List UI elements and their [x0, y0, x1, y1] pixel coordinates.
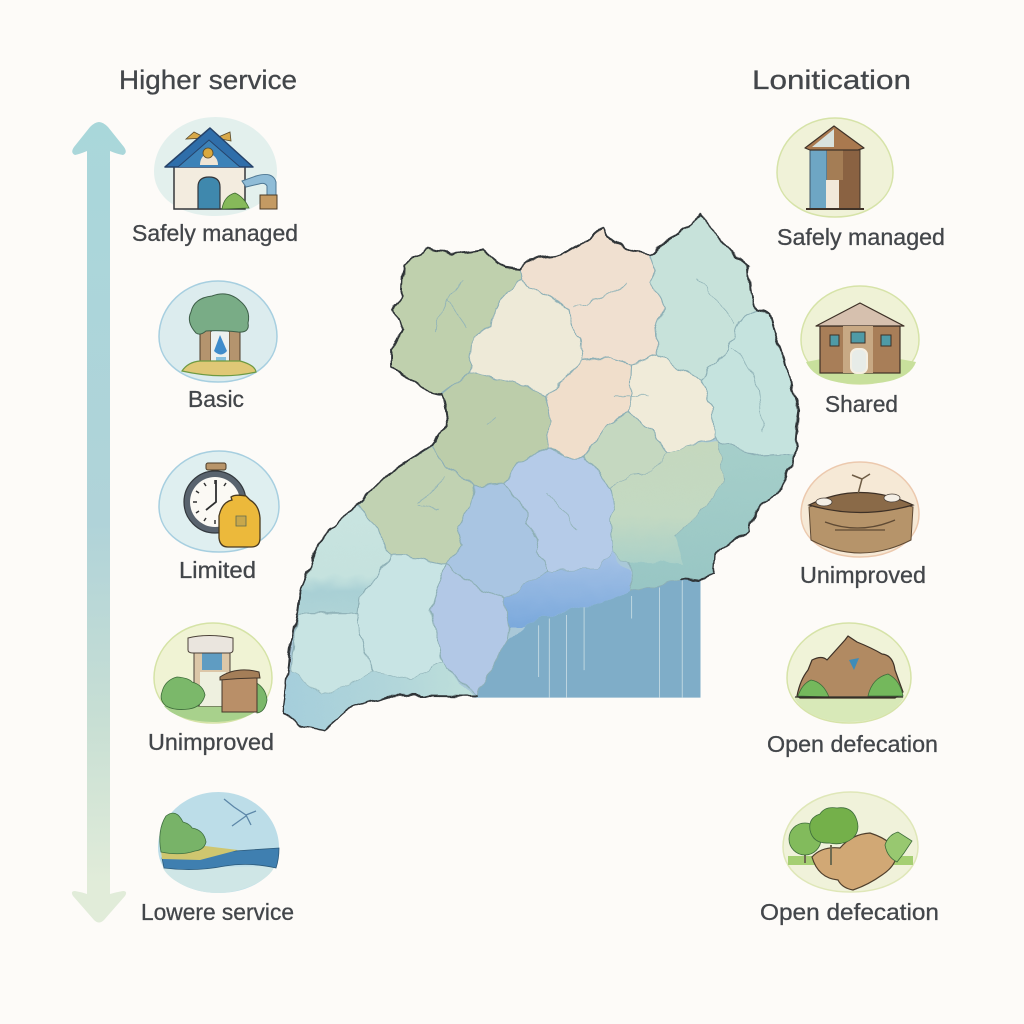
label: limited: Limited — [179, 557, 256, 583]
icon: unimproved pit — [801, 462, 919, 557]
label: safely managed: Safely managed — [132, 220, 298, 246]
panel: left service ladder — [132, 117, 298, 925]
icon: safely managed house — [154, 117, 277, 216]
icon: safely managed tall building — [777, 118, 893, 217]
icon: lowest service river landscape — [158, 792, 279, 893]
label: unimproved: Unimproved — [800, 562, 926, 588]
label: safely managed: Safely managed — [777, 224, 945, 250]
icon: open defecation mound — [787, 623, 911, 723]
label: open defecation: Open defecation — [760, 899, 939, 925]
title: location: Lonitication — [752, 65, 911, 95]
label: shared: Shared — [825, 391, 898, 417]
panel: map of regions — [284, 214, 799, 730]
panel: right location ladder — [760, 118, 945, 925]
icon: shared house — [801, 286, 919, 384]
icon: limited clock and jerrycan — [159, 451, 279, 552]
label: lowere service: Lowere service — [141, 899, 294, 925]
water body rectangle — [473, 570, 700, 698]
map regions — [284, 214, 799, 730]
label: unimproved: Unimproved — [148, 729, 274, 755]
icon: basic tree shelter — [159, 281, 277, 382]
double-headed service arrow — [72, 122, 126, 922]
label: basic: Basic — [188, 386, 244, 412]
label: open defecation: Open defecation — [767, 731, 938, 757]
icon: unimproved latrine with bushes — [154, 623, 272, 723]
title: higher service: Higher service — [119, 65, 297, 95]
icon: open defecation clearing with trees — [783, 792, 918, 892]
